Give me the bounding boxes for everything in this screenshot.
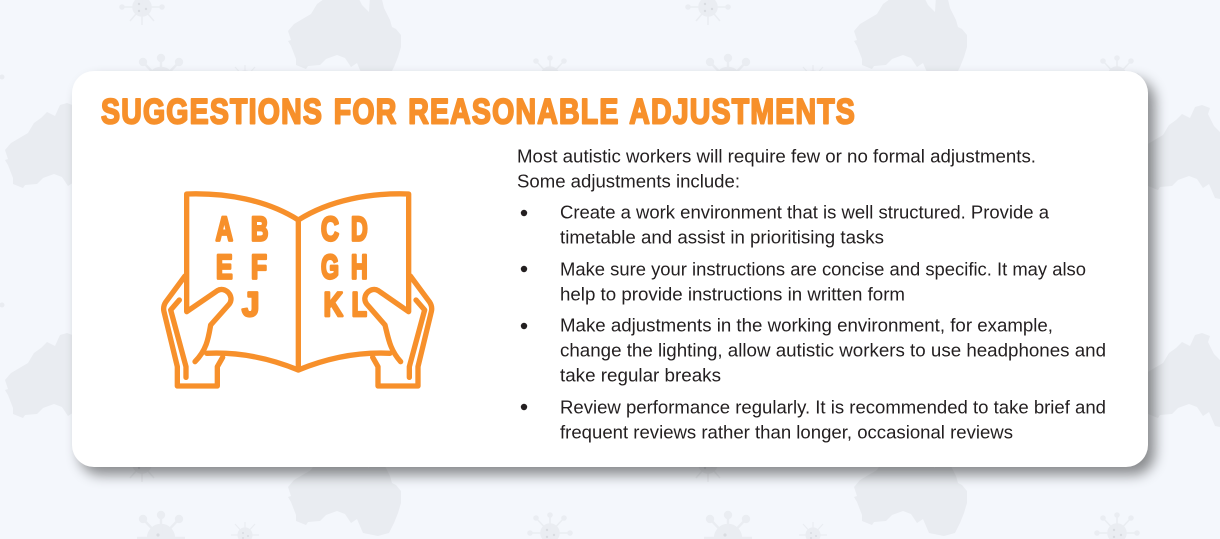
- list item: concise instructions: Make sure your instructions are concise and specific. It may also: [560, 258, 1086, 280]
- panel: suggestions card: [72, 71, 1148, 467]
- icon: open alphabet book held by two hands: L: [352, 286, 367, 324]
- icon: open alphabet book held by two hands: J: [242, 286, 259, 324]
- list item: performance reviews: frequent reviews rather than longer, occasional reviews: [560, 422, 1013, 442]
- list item: concise instructions: [521, 258, 1086, 304]
- list item: working environment: change the lighting, allow autistic workers to use headphones and: [560, 340, 1106, 360]
- icon: open alphabet book held by two hands: A: [216, 211, 233, 249]
- list item: working environment: [521, 314, 1106, 386]
- icon: open alphabet book held by two hands: F: [251, 249, 267, 287]
- list item: performance reviews: [521, 396, 1106, 442]
- icon: open alphabet book held by two hands: G: [321, 249, 339, 287]
- list item: working environment: take regular breaks: [560, 364, 721, 386]
- list item: working environment: Make adjustments in the working environment, for example,: [560, 314, 1053, 336]
- list item: structured environment: [521, 202, 1050, 248]
- intro text: Most autistic workers will require few or no formal adjustments.: [517, 146, 1036, 166]
- list item: concise instructions: help to provide instructions in written form: [560, 284, 905, 304]
- icon: open alphabet book held by two hands: H: [351, 249, 368, 287]
- icon: open alphabet book held by two hands: B: [251, 211, 268, 249]
- icon: open alphabet book held by two hands: D: [351, 211, 368, 249]
- list item: structured environment: Create a work environment that is well structured. Provide a: [560, 202, 1050, 222]
- icon: open alphabet book held by two hands: K: [324, 286, 343, 324]
- icon: open alphabet book held by two hands: E: [216, 249, 233, 287]
- title: SUGGESTIONS FOR REASONABLE ADJUSTMENTS: [101, 92, 856, 132]
- intro text: Some adjustments include:: [517, 170, 740, 192]
- list item: structured environment: timetable and assist in prioritising tasks: [560, 226, 884, 248]
- list item: performance reviews: Review performance regularly. It is recommended to take brief and: [560, 396, 1106, 418]
- intro text: [517, 146, 1036, 192]
- icon: open alphabet book held by two hands: C: [321, 211, 339, 249]
